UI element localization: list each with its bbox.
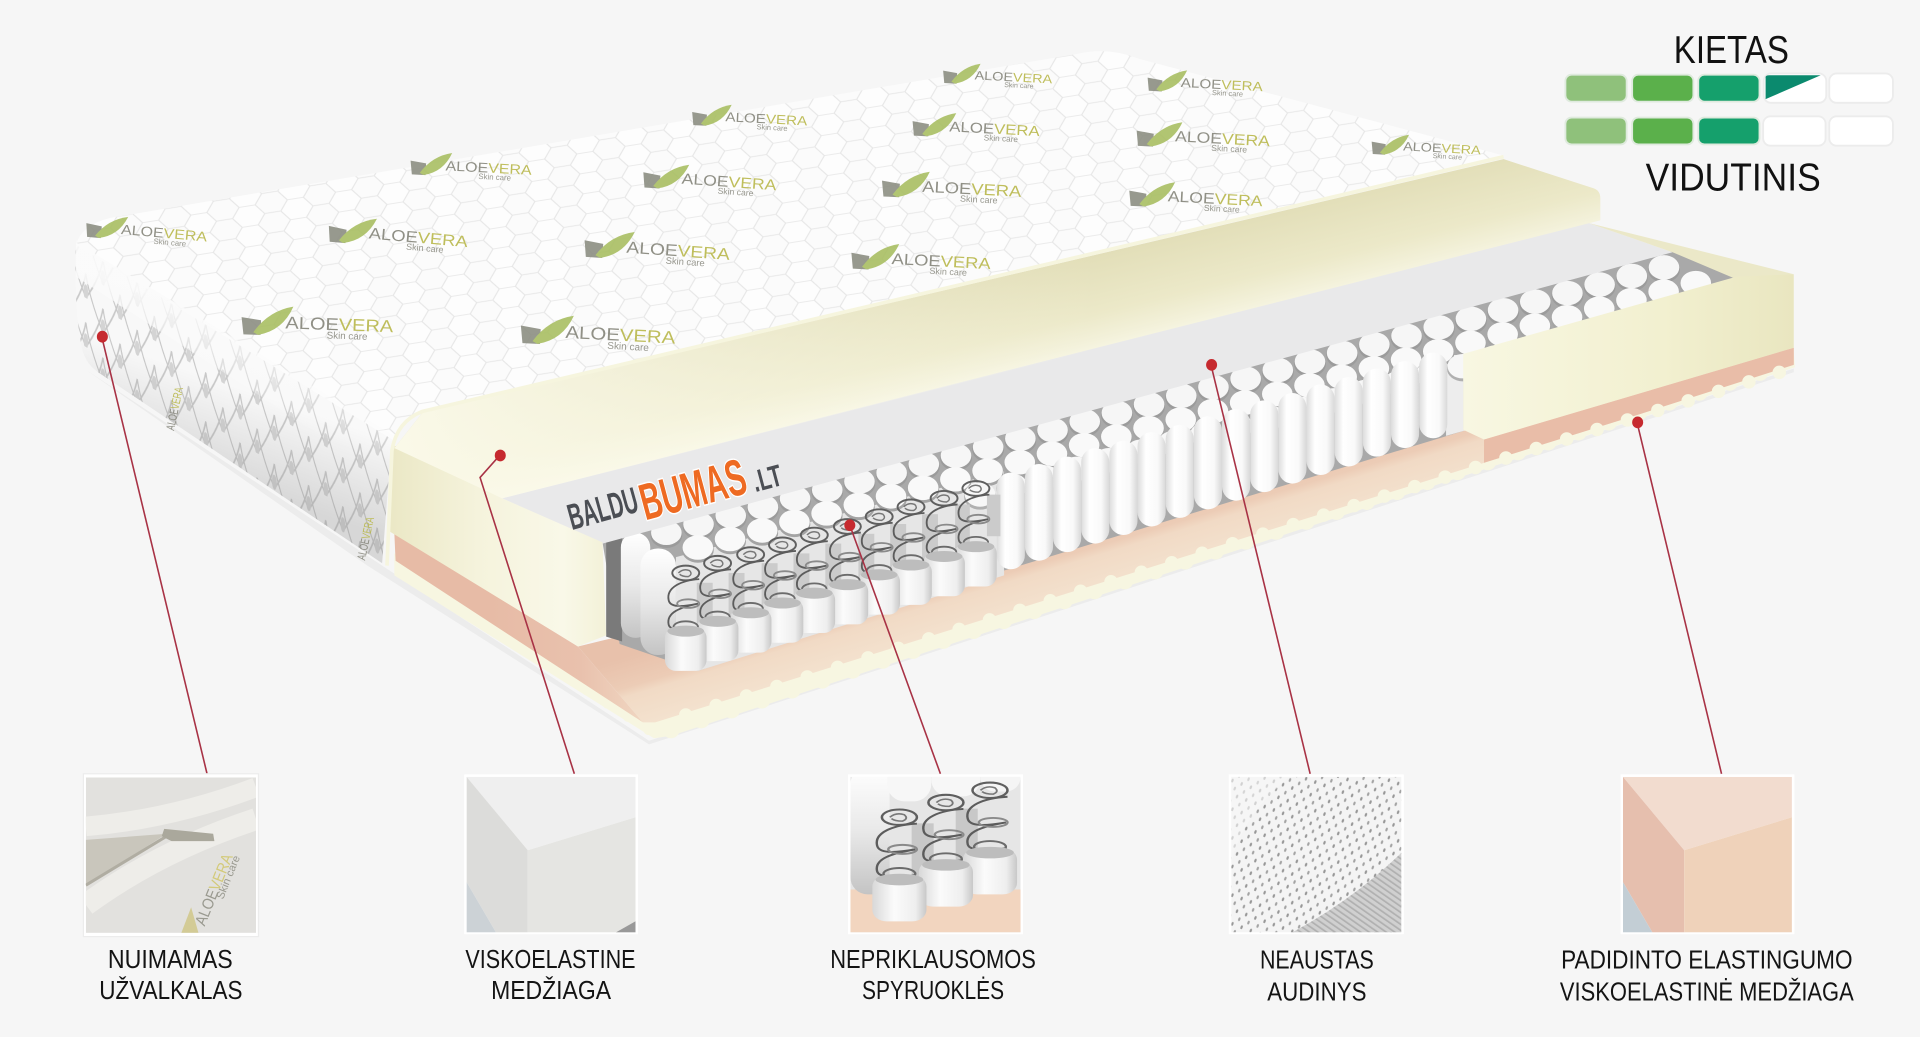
thumbnail: springs <box>848 762 1023 934</box>
spring pocket tops <box>666 267 1720 551</box>
front row of wrapped pockets <box>997 353 1447 569</box>
logo: ALOE VERA <box>922 179 1022 201</box>
non-woven fabric sheet <box>502 223 1673 544</box>
logo: Skin care <box>1204 203 1240 215</box>
base layer: peach elastic viscoelastic foam <box>394 348 1794 722</box>
logo: Skin care <box>478 172 511 183</box>
logo: Skin care <box>1004 82 1034 91</box>
removable cover <box>75 51 1504 566</box>
logo <box>327 215 470 257</box>
callout: non-woven fabric <box>1206 359 1310 774</box>
logo: ALOE VERA <box>1403 139 1482 157</box>
brand watermark: BALDU <box>563 479 642 538</box>
left foam block <box>389 444 606 646</box>
logo <box>1136 120 1272 156</box>
tall pockets at cut end <box>621 533 676 655</box>
panel: independent springs <box>830 762 1036 1005</box>
label: AUDINYS <box>1267 978 1366 1006</box>
logo <box>520 313 677 355</box>
pocket springs <box>602 251 1739 671</box>
label <box>99 946 243 1005</box>
side logo: ALOEVERA <box>355 516 378 561</box>
thumbnail: perforated fabric <box>1229 774 1404 934</box>
panel: non-woven fabric <box>1229 774 1404 1006</box>
logo: ALOE VERA <box>1181 75 1263 94</box>
logo <box>1147 68 1264 100</box>
rating row: hard <box>1565 73 1893 103</box>
logo: Skin care <box>153 237 186 249</box>
callout: springs <box>844 519 940 774</box>
base layer: cream wavy foam <box>394 353 1795 738</box>
mattress ground shadow <box>86 369 1794 744</box>
logo: ALOE VERA <box>974 68 1053 86</box>
right foam block <box>1463 223 1794 440</box>
label <box>1260 946 1374 1006</box>
logo: Skin care <box>717 186 754 198</box>
logo <box>881 169 1023 207</box>
heading: medium side: VIDUTINIS <box>1646 156 1821 199</box>
logo: ALOE VERA <box>949 119 1041 140</box>
callout: cover <box>97 331 207 774</box>
logo: ALOE VERA <box>368 225 469 251</box>
logo: ALOE VERA <box>1175 128 1271 150</box>
label: PADIDINTO ELASTINGUMO <box>1561 946 1853 974</box>
thumbnail: zipper: Skin care <box>215 854 243 901</box>
logo <box>583 229 731 270</box>
mattress illustration <box>75 51 1795 744</box>
logo <box>241 305 394 344</box>
logo: Skin care <box>756 122 788 133</box>
panel: removable cover <box>83 774 258 1005</box>
logo <box>642 162 778 200</box>
logo: Skin care <box>984 133 1019 144</box>
rating row: medium <box>1565 116 1893 146</box>
label: NEPRIKLAUSOMOS <box>830 946 1036 974</box>
callout: elastic foam <box>1632 417 1722 774</box>
logo: ALOE VERA <box>891 251 992 273</box>
upper viscoelastic foam layer <box>394 159 1600 498</box>
thumbnail: white foam <box>464 774 638 934</box>
firmness scale <box>1565 29 1893 199</box>
logo: ALOE VERA <box>626 239 730 264</box>
brand watermark <box>563 447 786 538</box>
logo <box>1371 133 1482 163</box>
logo <box>1128 180 1264 216</box>
logo: Skin care <box>406 242 444 255</box>
label <box>465 946 636 1005</box>
cover cut edge <box>387 157 1504 566</box>
label <box>830 946 1036 1005</box>
logo: Skin care <box>665 255 705 268</box>
logo: ALOE VERA <box>681 171 778 194</box>
logo: Skin care <box>960 194 998 206</box>
label: MEDŽIAGA <box>491 976 612 1005</box>
exposed coil springs <box>665 481 1000 671</box>
label: UŽVALKALAS <box>99 976 243 1005</box>
heading: hard side: KIETAS <box>1674 29 1789 72</box>
callout: viscoelastic foam <box>480 450 574 774</box>
soft transition between top and side <box>76 242 394 480</box>
thumbnail: peach foam <box>1621 774 1794 934</box>
label: VISKOELASTINE <box>465 946 636 974</box>
panel: viscoelastic foam <box>464 774 638 1005</box>
thumbnail: zipper <box>83 774 258 937</box>
label: SPYRUOKLĖS <box>862 976 1004 1005</box>
logo <box>850 242 992 279</box>
logo <box>85 213 209 250</box>
logo: ALOE VERA <box>1167 188 1264 210</box>
label: NUIMAMAS <box>108 946 233 974</box>
brand watermark: BUMAS <box>633 447 752 531</box>
cover top with quilted hexagons <box>76 51 1504 441</box>
thumbnail: zipper: ALOEVERA <box>193 851 237 928</box>
logo: Skin care <box>1432 153 1462 162</box>
pocket background <box>602 251 1739 671</box>
logo <box>942 62 1054 92</box>
logo: Skin care <box>607 341 650 354</box>
logo: ALOE VERA <box>565 322 676 348</box>
side logo: ALOEVERA <box>164 386 187 432</box>
logo: Skin care <box>1211 143 1248 155</box>
logo: ALOE VERA <box>725 109 808 128</box>
logo <box>691 103 808 134</box>
brand watermark: .LT <box>749 458 786 499</box>
logo <box>912 111 1041 145</box>
label: NEAUSTAS <box>1260 946 1374 974</box>
label: VISKOELASTINĖ MEDŽIAGA <box>1560 977 1854 1006</box>
label <box>1560 946 1854 1006</box>
logo <box>410 151 533 184</box>
logo: Skin care <box>326 330 368 343</box>
cover side with quilted scales <box>75 240 394 563</box>
logo: ALOE VERA <box>445 158 533 178</box>
logo: ALOE VERA <box>121 222 209 245</box>
panel: high-elasticity viscoelastic foam <box>1560 774 1854 1006</box>
logo: ALOE VERA <box>285 312 394 336</box>
logo: Skin care <box>929 266 967 278</box>
logo: Skin care <box>1212 88 1243 99</box>
